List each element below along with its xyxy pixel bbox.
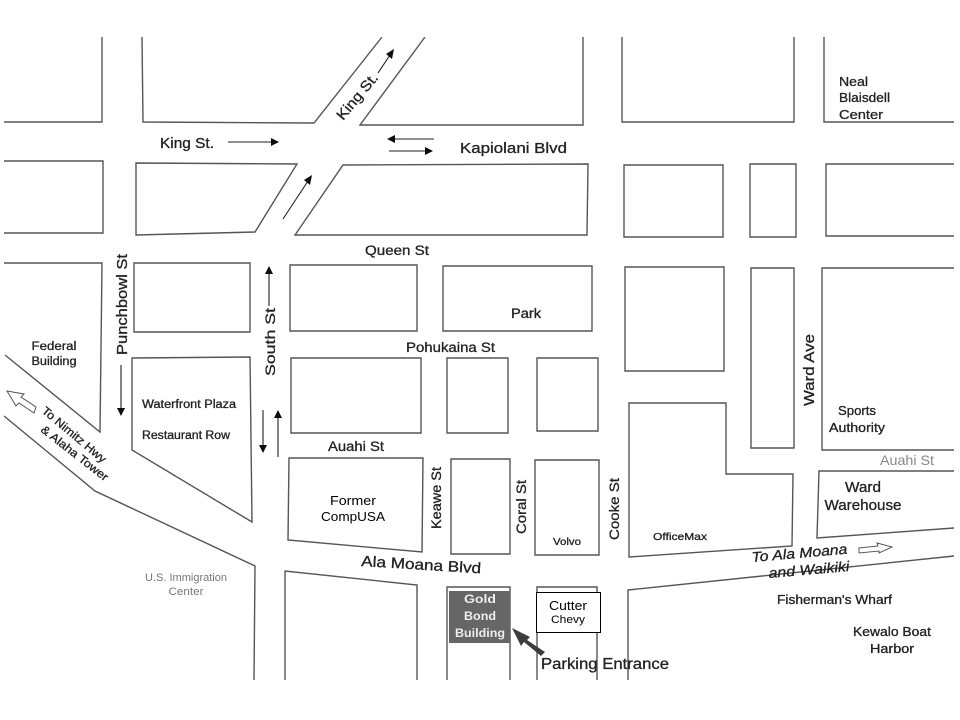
label: Neal Blaisdell Center: Neal [839, 75, 868, 89]
label: Parking Entrance: Parking Entrance [541, 656, 669, 673]
label: To Nimitz Hwy and Aloha Tower: & Alaha Tower [38, 424, 110, 484]
label: Federal Building: Federal [32, 341, 76, 353]
label: Coral St: Coral St [513, 480, 529, 534]
Gold Bond Building: Building [455, 626, 505, 640]
label: OfficeMax: OfficeMax [653, 531, 708, 543]
label: U.S. Immigration Center: U.S. Immigration [145, 572, 227, 584]
label: Sports Authority [829, 404, 886, 435]
label: To Ala Moana and Waikiki: To Ala Moana [751, 541, 848, 565]
label: Former CompUSA: Former [330, 494, 376, 508]
label: Federal Building: Building [32, 356, 76, 368]
label: Sports Authority: Sports [838, 404, 876, 418]
label: Restaurant Row: Restaurant Row [142, 430, 231, 442]
label: South St: South St [262, 308, 278, 376]
label: Ward Warehouse [824, 480, 902, 514]
label: Waterfront Plaza: Waterfront Plaza [142, 399, 237, 411]
label: Ward Warehouse: Ward [845, 480, 881, 496]
label: Kapiolani Blvd: Kapiolani Blvd [460, 141, 567, 157]
label: Auahi St east: Auahi St [880, 452, 934, 468]
label: Ward Warehouse: Warehouse [824, 498, 902, 514]
label: To Nimitz Hwy and Aloha Tower: To Nimitz Hwy [39, 405, 108, 466]
label: To Nimitz Hwy and Aloha Tower [38, 405, 110, 484]
label: Punchbowl St: Punchbowl St [115, 254, 131, 355]
label box: Cutter Chevy: Cutter [549, 599, 587, 613]
label: Park: Park [511, 306, 541, 321]
outline arrow: to Waikiki [859, 543, 892, 553]
label: Neal Blaisdell Center [839, 75, 890, 122]
label: Kewalo Boat Harbor: Harbor [870, 642, 914, 656]
label: Auahi St: Auahi St [328, 438, 384, 454]
label: Volvo: Volvo [553, 536, 581, 548]
direction arrows [117, 49, 434, 457]
label: King St diagonal: King St. [334, 70, 382, 124]
label: U.S. Immigration Center [145, 572, 227, 598]
label: Kewalo Boat Harbor [853, 625, 932, 656]
Gold Bond Building: Gold [464, 592, 496, 606]
label: Former CompUSA: CompUSA [321, 510, 386, 524]
label: Former CompUSA [321, 494, 386, 524]
label: Sports Authority: Authority [829, 421, 886, 435]
label: To Ala Moana and Waikiki: and Waikiki [768, 558, 851, 581]
label: Pohukaina St: Pohukaina St [406, 340, 495, 355]
label: Ala Moana Blvd: Ala Moana Blvd [361, 553, 482, 577]
outline arrow: to Nimitz [7, 391, 36, 413]
label: Neal Blaisdell Center: Blaisdell [839, 91, 890, 105]
label: Queen St: Queen St [365, 243, 429, 258]
label: Kewalo Boat Harbor: Kewalo Boat [853, 625, 932, 639]
label: Ward Ave: Ward Ave [802, 334, 818, 406]
Gold Bond Building [449, 591, 510, 643]
label: Keawe St: Keawe St [429, 467, 444, 529]
label box: Cutter Chevy: Chevy [551, 614, 586, 626]
label: Cooke St: Cooke St [606, 478, 622, 540]
label box: Cutter Chevy [536, 592, 600, 632]
label: U.S. Immigration Center: Center [168, 586, 204, 598]
label: Federal Building [32, 341, 76, 368]
label: Neal Blaisdell Center: Center [839, 108, 883, 122]
parking arrow [512, 628, 545, 656]
Gold Bond Building: Bond [464, 609, 496, 623]
label: King St horizontal: King St. [160, 136, 214, 152]
label: To Ala Moana and Waikiki [751, 541, 851, 581]
label: Fisherman's Wharf: Fisherman's Wharf [777, 593, 893, 607]
